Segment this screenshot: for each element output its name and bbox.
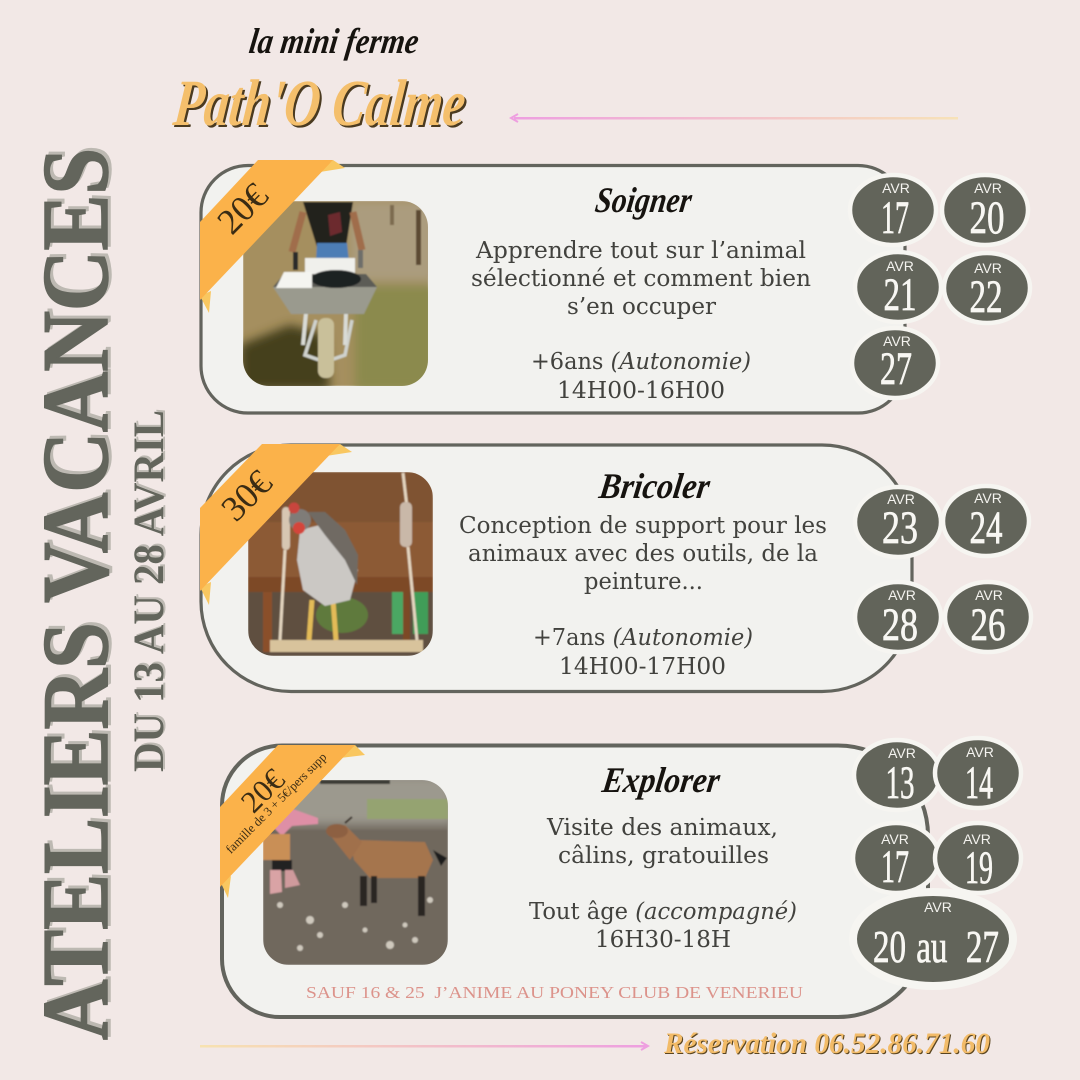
logo: la mini ferme: la mini ferme <box>247 21 421 61</box>
date badges: Soigner: AVR <box>974 260 1002 276</box>
arrow: bottom decorative line <box>200 1042 648 1050</box>
description: Soigner: s’en occuper <box>567 294 716 320</box>
date badges: Bricoler: 26 <box>970 599 1006 651</box>
date badges: Bricoler: AVR <box>887 491 915 507</box>
date badges: Soigner: AVR <box>974 180 1002 196</box>
details: age and time: +7ans (Autonomie) <box>533 625 753 651</box>
date badges: Soigner: AVR <box>882 180 910 196</box>
description: Explorer: câlins, gratouilles <box>558 843 769 869</box>
description: Soigner: Apprendre tout sur l’animal <box>475 238 806 264</box>
date badges: Explorer: AVR <box>966 744 994 760</box>
date badges: Explorer: au <box>916 921 956 972</box>
vertical title: ATELIERS VACANCES: ATELIERS VACANCES <box>27 145 131 1037</box>
date badges: Bricoler: AVR <box>888 587 916 603</box>
vertical subtitle: dates: DU 13 AU 28 AVRIL <box>128 408 175 770</box>
date badges: Soigner: 27 <box>880 343 912 395</box>
date badges: Explorer: 27 <box>966 921 999 972</box>
card background <box>201 445 912 692</box>
arrow: top decorative line <box>511 114 958 122</box>
price ribbon: 20€ <box>200 160 345 313</box>
reservation phone number: Réservation 06.52.86.71.60 <box>663 1027 990 1060</box>
price ribbon: 30€: 30€ <box>213 462 280 529</box>
heading: Soigner: Soigner <box>593 180 695 220</box>
description: Explorer: Visite des animaux, <box>546 815 778 841</box>
details: age and time <box>531 349 751 404</box>
date badges: Soigner <box>850 175 1030 398</box>
price ribbon: 20€ famille <box>220 745 365 898</box>
date badges: Soigner: 20 <box>970 192 1004 244</box>
details: age and time: 14H00-17H00 <box>559 654 726 680</box>
date badges: Soigner: 22 <box>970 271 1002 323</box>
panel: Soigner <box>200 160 1030 413</box>
date badges: Explorer: AVR <box>881 831 909 847</box>
date badges: Explorer: AVR <box>924 899 952 915</box>
date badges: Soigner: 21 <box>884 269 916 321</box>
date badges: Explorer: AVR <box>888 745 916 761</box>
photo: wheelbarrow <box>240 201 435 390</box>
description: Bricoler: Conception de support pour les <box>459 513 827 539</box>
photo: child and goat <box>258 775 453 965</box>
details: age and time <box>529 899 797 953</box>
date badges: Explorer: 14 <box>965 757 993 809</box>
price ribbon: 30€ <box>200 444 352 605</box>
description: Bricoler <box>459 513 827 595</box>
photo: hen on a swing <box>248 472 433 656</box>
logo: Path'O Calme: Path'O Calme <box>170 67 469 140</box>
date badges: Explorer: 20 <box>873 921 914 972</box>
date badges: Bricoler: 24 <box>970 502 1002 554</box>
heading: Explorer: Explorer <box>599 760 723 800</box>
date badges: Soigner: AVR <box>886 258 914 274</box>
panel: Bricoler <box>200 444 1031 692</box>
heading: Bricoler: Bricoler <box>596 466 713 506</box>
date badges: Soigner: 17 <box>881 192 909 244</box>
date badges: Explorer: AVR <box>963 831 991 847</box>
description: Soigner: sélectionné et comment bien <box>471 266 811 292</box>
date badges: Bricoler: 23 <box>882 502 918 554</box>
reservation phone number: Réservation 06.52.86.71.60 <box>664 1028 991 1061</box>
date badges: Explorer <box>853 738 1021 986</box>
price ribbon: 20€ famille: 20€ <box>234 761 292 819</box>
price ribbon: 20€ famille: famille de 3 + 5€/pers supp <box>223 750 329 856</box>
details: age and time: 16H30-18H <box>595 927 731 953</box>
price ribbon: 20€: 20€ <box>209 175 276 242</box>
details: age and time <box>533 625 753 680</box>
vertical subtitle: dates: DU 13 AU 28 AVRIL <box>126 410 173 772</box>
description: Explorer <box>546 815 778 869</box>
description: Bricoler: animaux avec des outils, de la <box>468 541 818 567</box>
date badges: Bricoler: AVR <box>975 587 1003 603</box>
date badges: Explorer: 19 <box>965 842 993 894</box>
date badges: Soigner: AVR <box>883 333 911 349</box>
details: age and time: +6ans (Autonomie) <box>531 349 751 375</box>
card background <box>201 166 905 413</box>
date badges: Bricoler: 28 <box>882 599 918 651</box>
vertical title: ATELIERS VACANCES: ATELIERS VACANCES <box>24 148 128 1040</box>
date badges: Bricoler <box>855 486 1031 652</box>
description: Soigner <box>471 238 811 320</box>
details: age and time: 14H00-16H00 <box>557 378 725 404</box>
date badges: Bricoler: AVR <box>974 490 1002 506</box>
logo: Path'O Calme: Path'O Calme <box>172 69 471 142</box>
description: Bricoler: peinture... <box>584 569 703 595</box>
panel: Explorer <box>220 738 1021 1017</box>
date badges: Explorer: 13 <box>886 757 914 809</box>
note: poney club: SAUF 16 & 25 J’ANIME AU PONEY CLUB DE VENERIEU <box>306 983 803 1002</box>
card background <box>222 746 928 1017</box>
details: age and time: Tout âge (accompagné) <box>529 899 797 925</box>
date badges: Explorer: 17 <box>881 841 909 893</box>
